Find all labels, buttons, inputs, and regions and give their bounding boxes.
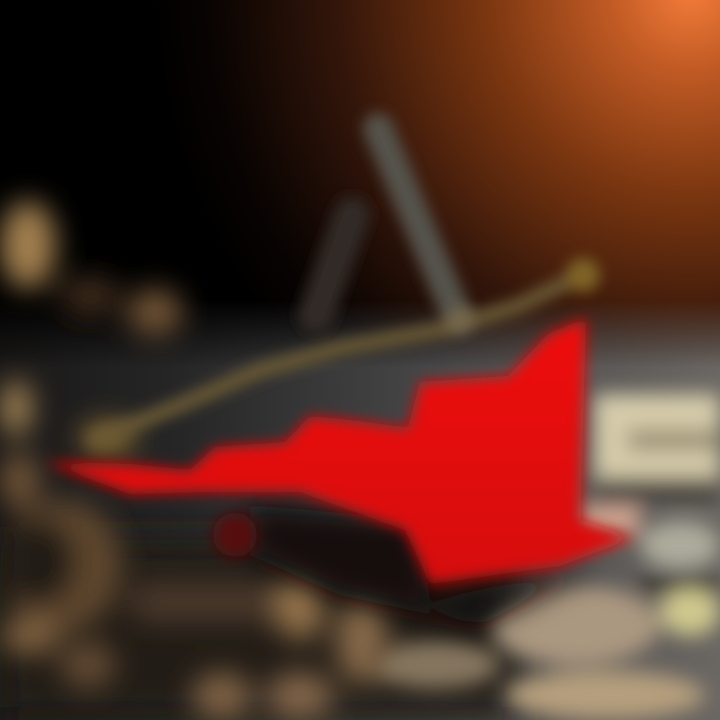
lower foreground shade [0,540,520,720]
table surface [0,300,720,720]
triangle stand [316,128,458,318]
light papers on right [370,394,720,720]
red chart shape [45,318,634,584]
gold trend line [90,258,600,442]
coins on left [0,201,388,720]
dark shadow beneath red chart [250,505,600,625]
